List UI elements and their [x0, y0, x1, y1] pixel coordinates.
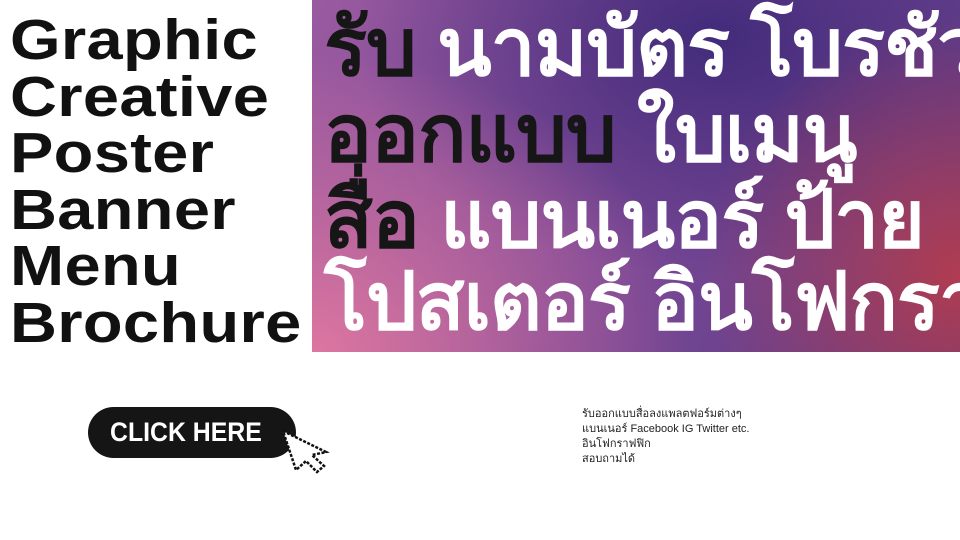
- icon: cursor arrow: [284, 432, 330, 474]
- text block: services: แบนเนอร์ Facebook IG Twitter etc.: [582, 423, 749, 435]
- heading list: Creative: [10, 64, 269, 128]
- heading list: Brochure: [10, 290, 302, 354]
- button: click here: [88, 407, 296, 458]
- panel: gradient thai text: [312, 0, 960, 352]
- heading list: Banner: [10, 178, 236, 242]
- thai line 3: สื่อ แบนเนอร์ ป้าย: [324, 175, 924, 264]
- text block: services: รับออกแบบสื่อลงแพลตฟอร์มต่างๆ: [582, 408, 742, 420]
- text block: services: สอบถามได้: [582, 453, 635, 465]
- button: click here: CLICK HERE: [110, 417, 262, 447]
- thai line 2: ออกแบบ ใบเมนู: [324, 89, 856, 178]
- heading list: Poster: [10, 121, 214, 185]
- heading list: Menu: [10, 234, 181, 298]
- heading list: Graphic: [10, 8, 258, 72]
- text block: services: อินโฟกราฟฟิก: [582, 438, 651, 450]
- text block: services: [582, 406, 749, 465]
- heading list: [10, 8, 302, 354]
